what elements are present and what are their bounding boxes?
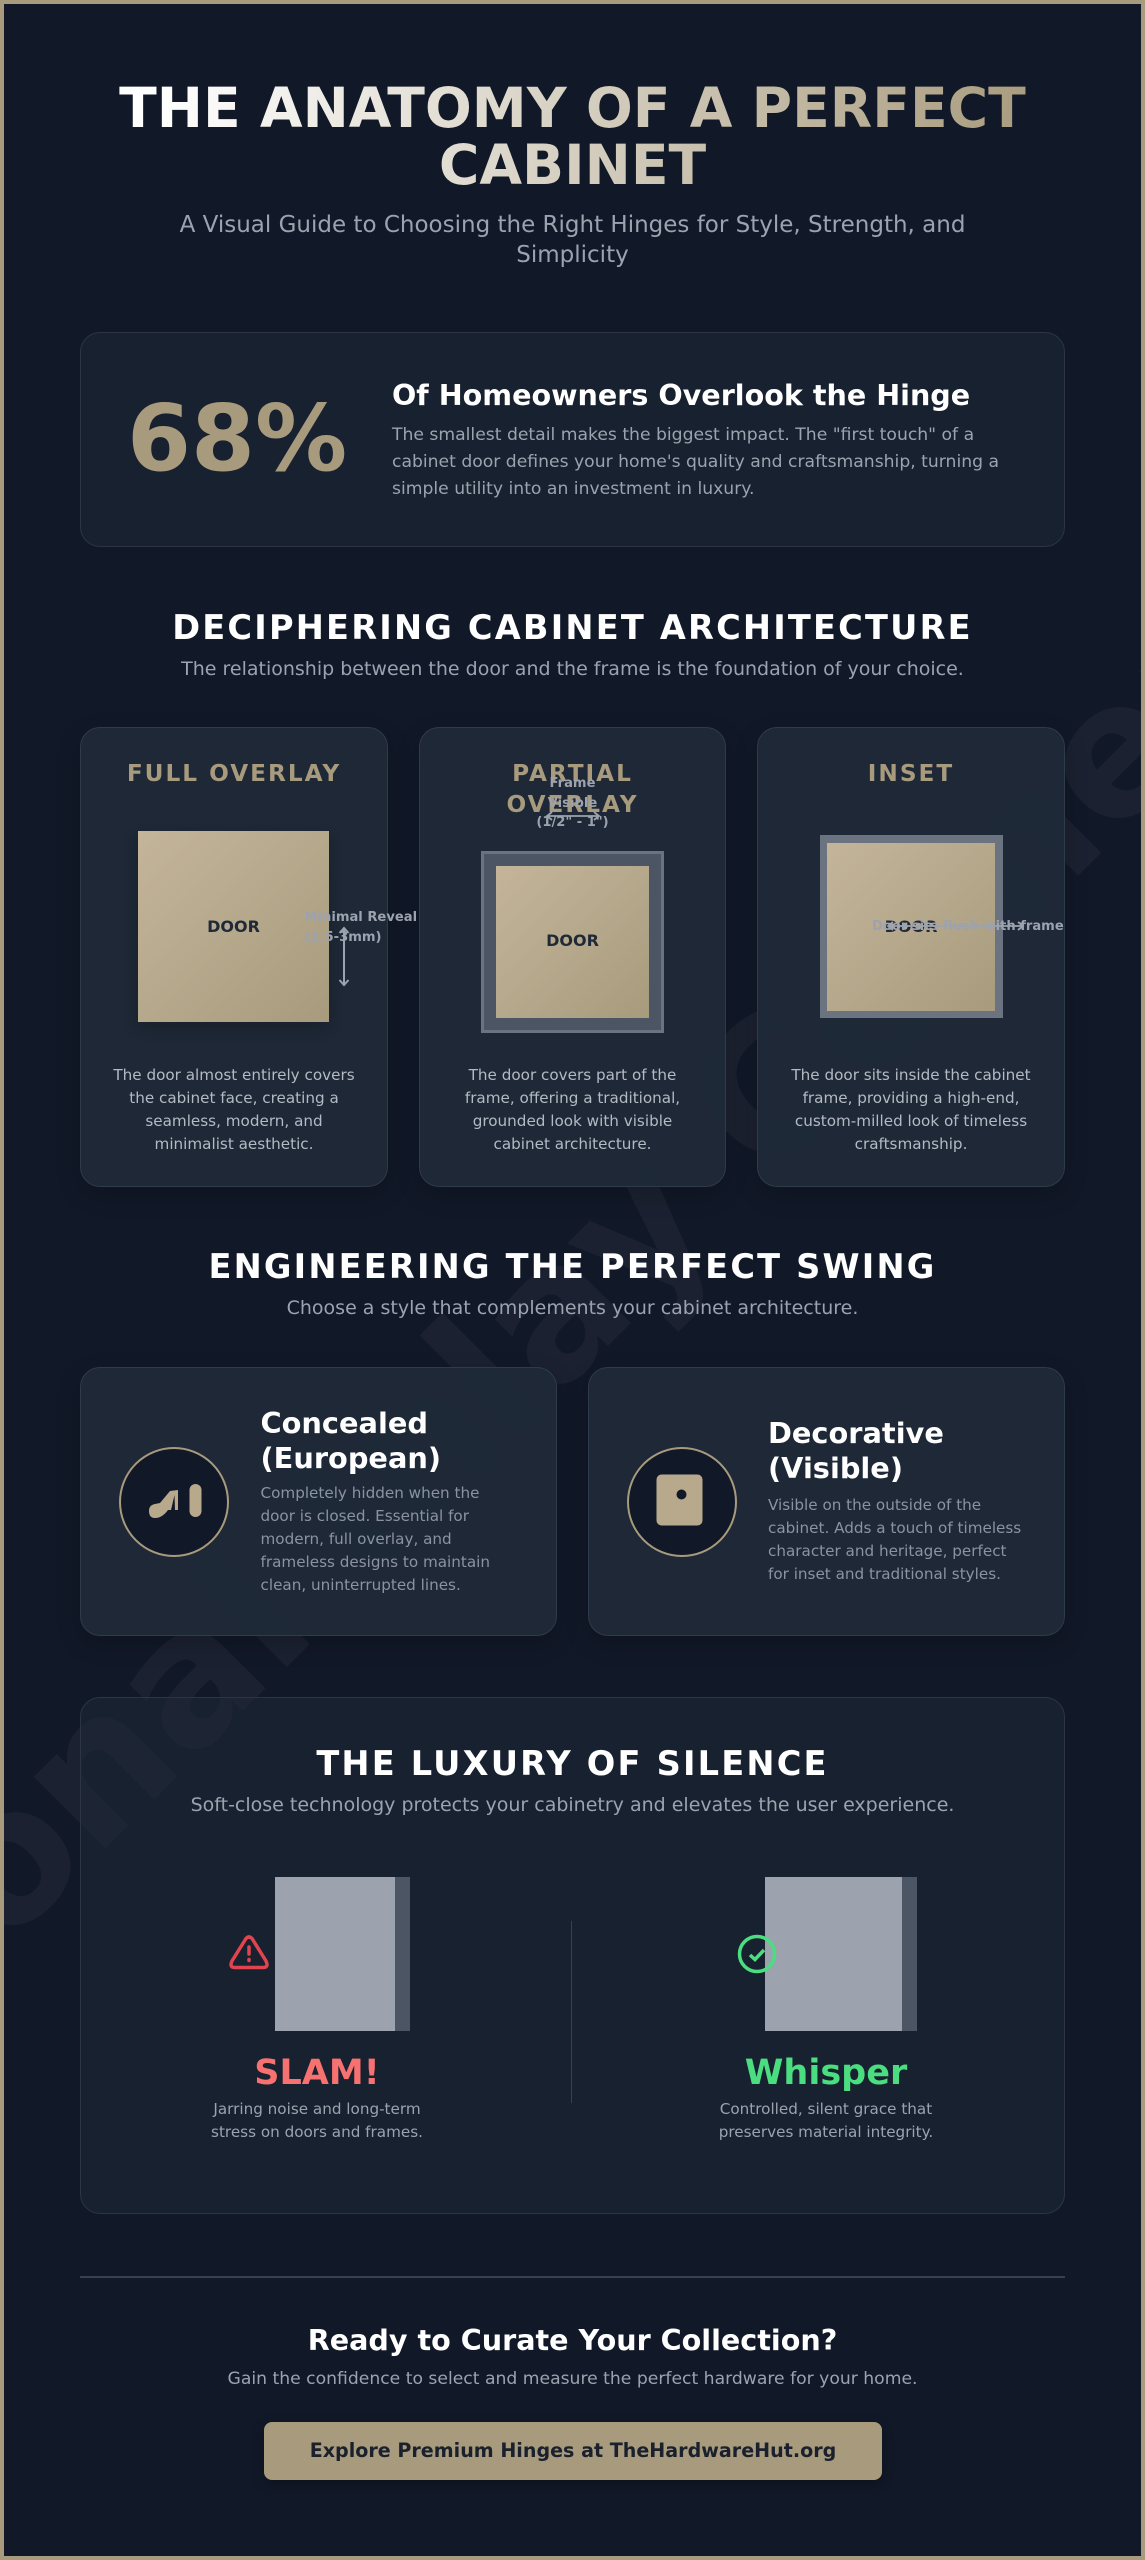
description	[465, 1066, 680, 1153]
hinge body: Visible on the outside of the	[768, 1496, 981, 1514]
hinge body: Completely hidden when the	[260, 1484, 479, 1502]
description: minimalist aesthetic.	[155, 1135, 313, 1153]
stat body: simple utility into an investment in luxury.	[392, 479, 754, 499]
door label: DOOR	[207, 917, 260, 936]
description	[113, 1066, 355, 1153]
call to action heading: Ready to Curate Your Collection?	[308, 2323, 837, 2357]
subtitle: A Visual Guide to Choosing the Right Hinges for Style, Strength, and	[180, 212, 965, 238]
slam description: Jarring noise and long-term	[213, 2100, 421, 2118]
hinge body	[260, 1484, 490, 1594]
vertical divider	[571, 1921, 572, 2103]
hinge body: cabinet. Adds a touch of timeless	[768, 1519, 1021, 1537]
reveal label: Minimal Reveal	[304, 910, 417, 925]
slam description: stress on doors and frames.	[211, 2123, 423, 2141]
stat heading: Of Homeowners Overlook the Hinge	[392, 378, 970, 412]
description: The door covers part of the	[469, 1066, 676, 1084]
call to action text: Gain the confidence to select and measure the perfect hardware for your home.	[228, 2369, 917, 2389]
subheading: Soft-close technology protects your cabinetry and elevates the user experience.	[191, 1794, 954, 1816]
card title: FULL OVERLAY	[127, 760, 341, 787]
stat body: cabinet door defines your home's quality and craftsmanship, turning a	[392, 452, 999, 472]
hinge body: modern, full overlay, and	[260, 1530, 452, 1548]
hinge body: clean, uninterrupted lines.	[260, 1576, 461, 1594]
description: seamless, modern, and	[145, 1112, 323, 1130]
door diagram	[138, 831, 329, 1022]
visible frame label: Visible	[548, 796, 597, 810]
card title: PARTIAL	[512, 760, 633, 787]
reveal label	[304, 910, 417, 944]
door panel	[765, 1877, 902, 2031]
hinge heading: (Visible)	[768, 1450, 903, 1484]
whisper description: preserves material integrity.	[719, 2123, 933, 2141]
subheading: architecture: The relationship between the door and the frame is the foundation of your choice.	[181, 658, 964, 680]
icon: concealed hinge	[119, 1447, 229, 1557]
reveal arrow	[338, 926, 350, 986]
hinge heading	[768, 1416, 944, 1484]
call to action button: Explore Premium Hinges at TheHardwareHut.org	[310, 2439, 836, 2462]
hinge body	[768, 1496, 1021, 1583]
door	[496, 866, 649, 1018]
description: frame, providing a high-end,	[803, 1089, 1019, 1107]
heading: deciphering cabinet architecture: DECIPHERING CABINET ARCHITECTURE	[172, 608, 973, 647]
subtitle: Simplicity	[516, 242, 629, 268]
title	[80, 81, 1065, 195]
description: The door sits inside the cabinet	[791, 1066, 1031, 1084]
footer divider	[80, 2276, 1065, 2278]
icon: decorative hinge	[627, 1447, 737, 1557]
visible frame label: (1/2" - 1")	[536, 815, 609, 830]
call to action button	[264, 2422, 882, 2480]
description: craftsmanship.	[855, 1135, 967, 1153]
hinge heading: Decorative	[768, 1416, 944, 1450]
door	[827, 843, 995, 1011]
door label: DOOR	[885, 917, 937, 936]
subtitle	[180, 212, 965, 268]
hinge body: for inset and traditional styles.	[768, 1565, 1001, 1583]
reveal label: (1.5-3mm)	[304, 930, 382, 944]
hinge heading: (European)	[260, 1440, 441, 1474]
card title	[506, 760, 639, 818]
description: The door almost entirely covers	[113, 1066, 355, 1084]
description: cabinet architecture.	[494, 1135, 652, 1153]
flush label: Door sits flush with frame	[872, 919, 1064, 934]
hinge heading: Concealed	[260, 1406, 428, 1440]
description: frame, offering a traditional,	[465, 1089, 680, 1107]
slam description	[211, 2100, 423, 2141]
visible frame label: Frame	[550, 776, 595, 791]
heading: THE LUXURY OF SILENCE	[316, 1744, 829, 1783]
whisper description: Controlled, silent grace that	[720, 2100, 932, 2118]
cabinet frame	[481, 851, 664, 1033]
stat body: The smallest detail makes the biggest impact. The "first touch" of a	[392, 425, 974, 445]
description: grounded look with visible	[473, 1112, 672, 1130]
heading: engineering the perfect swing: ENGINEERING THE PERFECT SWING	[208, 1247, 937, 1286]
frame arrow	[546, 811, 600, 821]
hinge body: frameless designs to maintain	[260, 1553, 490, 1571]
panel: inset	[757, 727, 1065, 1187]
icon: check circle	[738, 1934, 776, 1974]
description: custom-milled look of timeless	[795, 1112, 1027, 1130]
description	[791, 1066, 1031, 1153]
hinge heading	[260, 1406, 441, 1474]
slam door diagram	[275, 1877, 410, 2031]
panel: the luxury of silence	[80, 1697, 1065, 2214]
panel: 68% statistic	[80, 332, 1065, 547]
whisper label: Whisper	[745, 2053, 907, 2093]
cabinet frame	[820, 835, 1003, 1018]
title: CABINET	[439, 134, 706, 198]
hinge body: door is closed. Essential for	[260, 1507, 469, 1525]
title: THE ANATOMY OF A PERFECT	[119, 77, 1026, 141]
flush arrow	[886, 921, 1024, 931]
description: the cabinet face, creating a	[129, 1089, 339, 1107]
subheading: swing: Choose a style that complements your cabinet architecture.	[287, 1297, 858, 1319]
hinge body: character and heritage, perfect	[768, 1542, 1007, 1560]
panel: partial overlay	[419, 727, 726, 1187]
card title: OVERLAY	[506, 790, 639, 818]
slam label: SLAM!	[254, 2053, 380, 2093]
card title: INSET	[868, 760, 954, 787]
panel: full overlay	[80, 727, 388, 1187]
panel: concealed hinge	[80, 1367, 557, 1636]
panel: decorative hinge	[588, 1367, 1065, 1636]
stat body	[392, 425, 999, 499]
door label: DOOR	[546, 931, 599, 950]
icon: warning triangle	[229, 1935, 269, 1970]
door panel	[275, 1877, 395, 2031]
stat number: 68%	[127, 385, 347, 492]
whisper description	[719, 2100, 933, 2141]
visible frame label	[536, 776, 609, 830]
whisper door diagram	[765, 1877, 917, 2031]
